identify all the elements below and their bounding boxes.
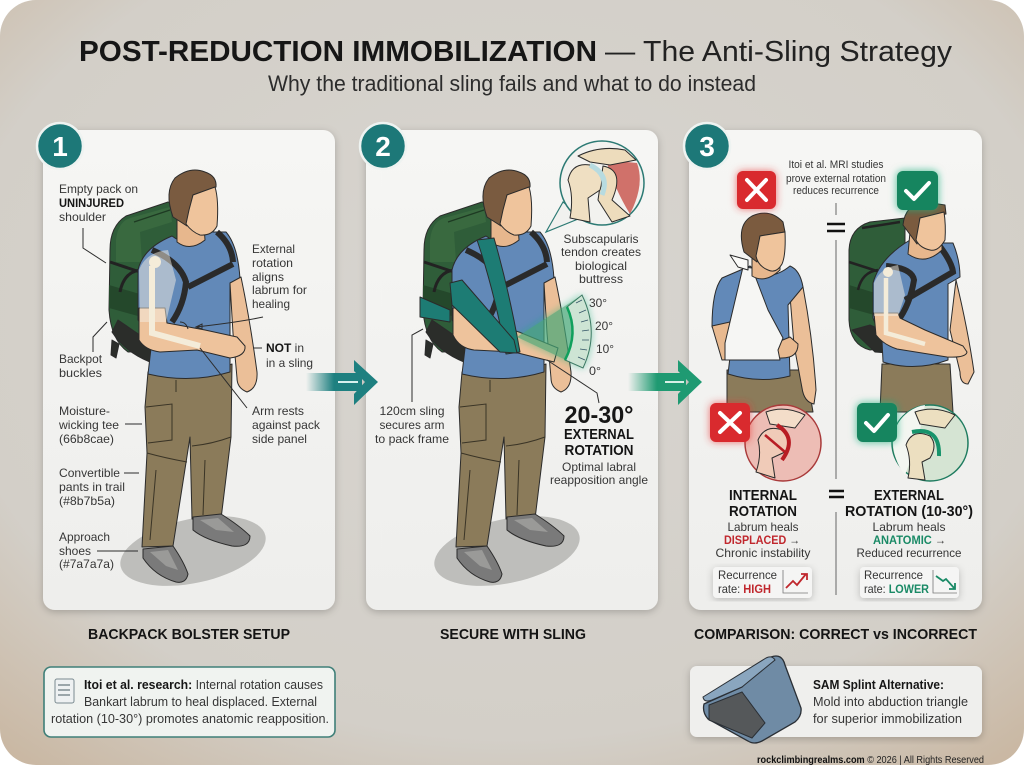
badge: step 1 — [37, 123, 83, 169]
figure: patient with pack in external rotation — [849, 202, 974, 412]
panel captions: SECURE WITH SLING — [440, 626, 586, 643]
labels: left column: UNINJURED — [59, 196, 124, 210]
badge: step 3 — [684, 123, 730, 169]
recurrence box: lower: rate: LOWER — [864, 582, 929, 596]
callout: SAM splint alternative: SAM Splint Alternative: — [813, 678, 944, 692]
icon: document — [55, 679, 74, 703]
callout: 20-30 degrees: EXTERNAL — [564, 426, 634, 443]
title — [79, 36, 953, 68]
labels: left column: pants in trail — [59, 480, 125, 494]
labels: left column: shoes — [59, 544, 91, 558]
callout: SAM splint alternative: Mold into abduction triangle — [813, 695, 968, 709]
text: external rotation: Reduced recurrence — [856, 546, 962, 560]
recurrence box: lower — [860, 567, 959, 598]
labels: left column: wicking tee — [58, 418, 119, 432]
callout: Itoi research: Itoi et al. research: Internal rotation causes — [84, 678, 323, 692]
labels: right column: healing — [252, 297, 290, 311]
labels: right column: NOT in — [266, 341, 304, 355]
text: Itoi MRI note — [786, 159, 886, 197]
callout: 20-30 degrees: ROTATION — [564, 442, 634, 459]
labels: right column — [180, 242, 321, 446]
panel: step 1 backpack bolster setup — [43, 130, 335, 610]
panel captions: COMPARISON: CORRECT vs INCORRECT — [694, 626, 977, 643]
text: external rotation: ROTATION (10-30°) — [845, 503, 973, 520]
inset: subscapularis shoulder detail — [546, 141, 644, 232]
callout: Itoi research — [44, 667, 335, 737]
divider with equals signs — [827, 203, 845, 595]
text: internal rotation: DISPLACED → — [724, 533, 800, 547]
arrow: step 2 to step 3 — [628, 360, 702, 405]
labels: right column: side panel — [252, 432, 307, 446]
callout: SAM splint alternative: for superior immobilization — [813, 712, 962, 726]
callout: SAM splint alternative — [690, 656, 982, 743]
recurrence box: high: Recurrence — [718, 568, 777, 582]
panel captions: BACKPACK BOLSTER SETUP — [88, 626, 290, 643]
icon: green check top — [897, 171, 938, 210]
protractor gauge: 20° — [595, 319, 613, 333]
label: subscapularis: Subscapularis — [564, 232, 638, 246]
labels: right column: in a sling — [266, 356, 313, 370]
arrow: step 1 to step 2 — [306, 360, 378, 405]
labels: right column: rotation — [252, 256, 293, 270]
protractor gauge: 30° — [589, 296, 607, 310]
labels: left column: Convertible — [59, 466, 120, 480]
recurrence box: lower: Recurrence — [864, 568, 923, 582]
label: subscapularis: tendon creates — [561, 245, 641, 259]
text: external rotation: Labrum heals — [872, 520, 946, 534]
badge: step 3: 3 — [699, 131, 715, 162]
text: Itoi MRI note: Itoi et al. MRI studies — [788, 159, 884, 171]
labels: left column: Moisture- — [59, 404, 110, 418]
labels: left column: Backpot — [59, 352, 103, 366]
labels: right column: against pack — [252, 418, 321, 432]
callout: Itoi research: Bankart labrum to heal displaced. External — [84, 695, 317, 709]
callout: 20-30 degrees: reapposition angle — [550, 473, 648, 487]
label: subscapularis — [561, 232, 641, 286]
text: Itoi MRI note: reduces recurrence — [793, 185, 879, 197]
callout: 20-30 degrees — [547, 360, 648, 487]
labels: right column: External — [252, 242, 295, 256]
badge: step 2 — [360, 123, 406, 169]
labels: left column: (66b8cae) — [59, 432, 114, 446]
recurrence box: high: rate: HIGH — [718, 582, 771, 596]
title: — The Anti-Sling Strategy — [605, 36, 953, 68]
inset: external rotation shoulder — [892, 405, 968, 481]
text: internal rotation: Chronic instability — [716, 546, 810, 560]
recurrence box: high — [713, 567, 812, 598]
icon: green check lower — [857, 403, 897, 442]
protractor gauge: 0° — [589, 364, 601, 378]
badge: step 2: 2 — [375, 131, 391, 162]
icon: red cross top — [737, 171, 776, 209]
labels: left column: buckles — [59, 366, 102, 380]
protractor gauge: 10° — [596, 342, 614, 356]
title: POST-REDUCTION IMMOBILIZATION — [79, 36, 597, 68]
labels: left column: shoulder — [59, 210, 106, 224]
callout: 20-30 degrees: Optimal labral — [562, 460, 636, 474]
labels: left column: Empty pack on — [59, 182, 138, 196]
figure: patient in traditional sling — [712, 213, 816, 412]
labels: left column — [58, 182, 142, 571]
text: external rotation — [845, 487, 973, 560]
text: internal rotation: ROTATION — [729, 503, 797, 520]
panel: step 2 secure with sling — [366, 130, 658, 610]
text: Itoi MRI note: prove external rotation — [786, 173, 886, 185]
protractor gauge — [517, 295, 614, 378]
labels: right column: Arm rests — [252, 404, 304, 418]
labels: left column: (#7a7a7a) — [59, 557, 114, 571]
panel captions — [88, 626, 977, 643]
labels: left column: (#8b7b5a) — [59, 494, 115, 508]
label: sling: to pack frame — [375, 432, 449, 446]
panel: step 3 comparison — [689, 130, 982, 610]
label: subscapularis: buttress — [579, 272, 623, 286]
callout: 20-30 degrees: 20-30° — [564, 402, 634, 429]
figure: hiker with pack and arm bolstered — [109, 170, 272, 598]
text: external rotation: EXTERNAL — [874, 487, 944, 504]
label: sling: secures arm — [380, 418, 444, 432]
figure: hiker with teal sling — [420, 170, 586, 598]
label: subscapularis: biological — [575, 259, 627, 273]
label: sling — [375, 329, 449, 446]
text: internal rotation: INTERNAL — [729, 487, 797, 504]
text: internal rotation — [716, 487, 810, 560]
label: sling: 120cm sling — [380, 404, 444, 418]
labels: right column: labrum for — [252, 283, 307, 297]
inset: internal rotation shoulder — [745, 405, 821, 481]
labels: left column: Approach — [59, 530, 110, 544]
icon: red cross lower — [710, 403, 750, 442]
text: external rotation: ANATOMIC → — [873, 533, 946, 547]
icon: SAM splint — [703, 656, 801, 743]
text: internal rotation: Labrum heals — [728, 520, 798, 534]
subtitle: Why the traditional sling fails and what to do instead — [268, 71, 756, 96]
labels: right column: aligns — [252, 270, 284, 284]
badge: step 1: 1 — [52, 131, 68, 162]
callout: Itoi research: rotation (10-30°) promotes anatomic reapposition. — [51, 712, 329, 726]
